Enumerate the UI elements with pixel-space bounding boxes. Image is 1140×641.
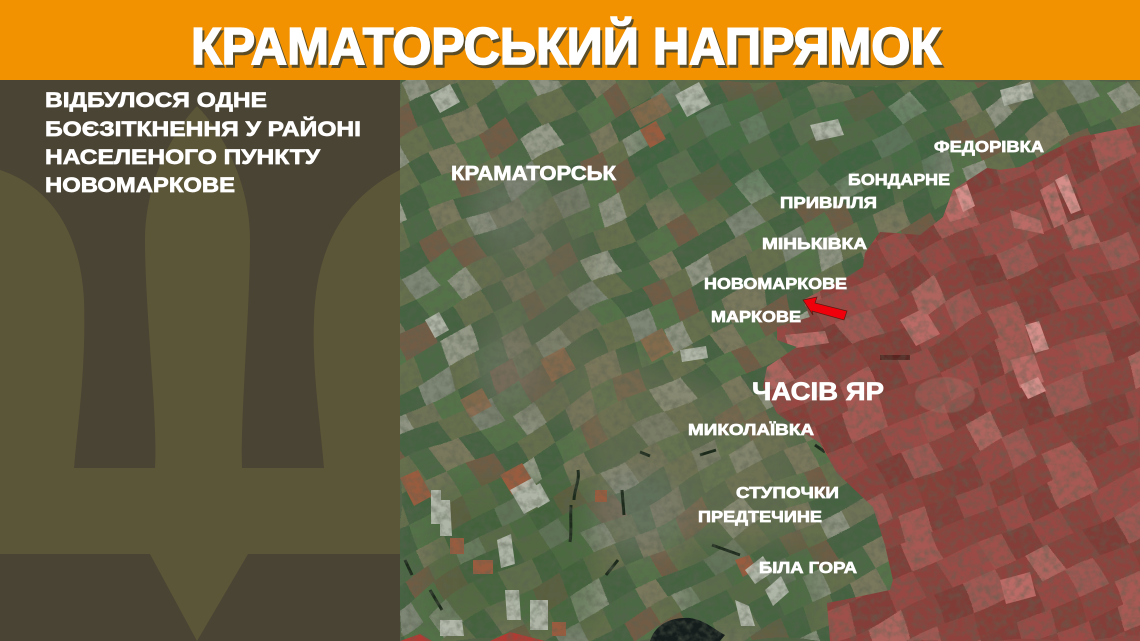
map labels: БІЛА ГОРА [759,560,858,577]
map labels: НОВОМАРКОВЕ [704,276,847,293]
map labels: МІНЬКІВКА [762,236,868,253]
text block: summary [45,89,361,197]
texture overlay [400,80,1140,641]
map: satellite imagery with occupied zone [400,80,1140,641]
title banner: КРАМАТОРСЬКИЙ НАПРЯМОК [193,20,943,79]
title banner [0,0,1140,80]
bottom-left red fragments [400,632,545,641]
text block: summary: НАСЕЛЕНОГО ПУНКТУ [45,146,321,169]
map labels: МИКОЛАЇВКА [688,421,815,439]
panel: left background with trident [0,80,400,641]
map labels: МАРКОВЕ [711,309,801,326]
occupied territory: red overlay [760,120,1140,641]
arrow: attack direction [803,297,847,320]
text block: summary: ВІДБУЛОСЯ ОДНЕ [45,89,267,112]
map labels: ПРИВІЛЛЯ [780,195,877,212]
text block: summary: БОЄЗІТКНЕННЯ У РАЙОНІ [45,117,361,141]
regional colour variation [430,90,940,640]
map labels: КРАМАТОРСЬК [451,163,617,185]
map labels: ЧАСІВ ЯР [752,378,884,406]
icon: trident emblem [0,106,400,641]
text block: summary: НОВОМАРКОВЕ [45,174,235,197]
map labels: ФЕДОРІВКА [934,139,1045,156]
map labels: СТУПОЧКИ [736,485,839,502]
fields: white and grey [425,82,1034,636]
title: КРАМАТОРСЬКИЙ НАПРЯМОК [191,17,941,76]
map labels: БОНДАРНЕ [848,172,950,189]
dark streams and lake [405,445,825,610]
map labels [451,139,1045,577]
map labels: ПРЕДТЕЧИНЕ [698,509,822,526]
fields: tan and brown [460,93,674,418]
